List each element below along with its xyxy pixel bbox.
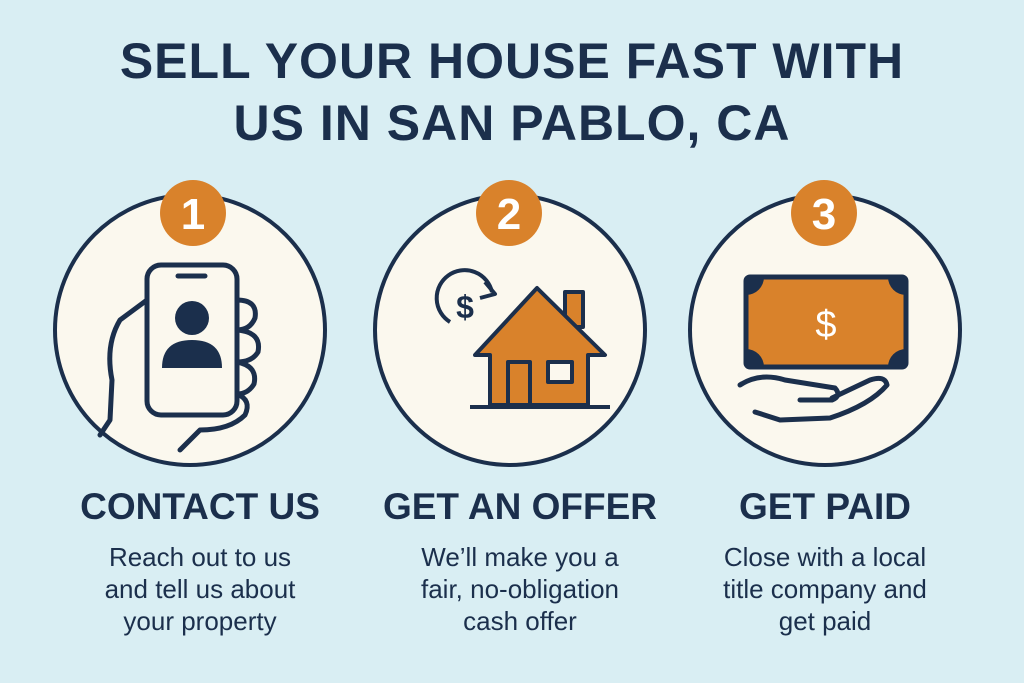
badge: 1: [160, 180, 226, 246]
text: step 3: get paid: [779, 606, 871, 636]
panel: step 1 circle: [55, 195, 325, 465]
panel: step 2 circle: $: [456, 289, 474, 325]
text: step 1: your property: [123, 606, 277, 636]
text: step 1: [105, 542, 296, 636]
text: step 2: fair, no-obligation: [421, 574, 619, 604]
text: step 3: title company and: [723, 574, 927, 604]
icon: house with dollar: [437, 270, 610, 407]
title: [120, 33, 904, 151]
text: step 3: [723, 542, 927, 636]
heading: get an offer: GET AN OFFER: [383, 486, 657, 527]
title: SELL YOUR HOUSE FAST WITH: [120, 33, 904, 89]
text: step 2: We’ll make you a: [421, 542, 619, 572]
text: step 2: cash offer: [463, 606, 577, 636]
badge: 2: 2: [497, 190, 521, 239]
panel: step 3 circle: [690, 195, 960, 465]
heading: get paid: GET PAID: [739, 486, 911, 527]
badge: 2: [476, 180, 542, 246]
badge: 1: 1: [181, 190, 205, 239]
badge: 3: 3: [812, 190, 836, 239]
badge: 3: [791, 180, 857, 246]
heading: contact us: CONTACT US: [80, 486, 320, 527]
icon: cash in hand: [746, 277, 906, 367]
text: step 1: and tell us about: [105, 574, 295, 604]
panel: step 3 circle: $: [815, 304, 837, 346]
text: step 1: Reach out to us: [109, 542, 291, 572]
title: US IN SAN PABLO, CA: [234, 95, 790, 151]
panel: step 2 circle: [375, 195, 645, 465]
icon: phone with hand: [100, 265, 259, 450]
text: step 2: [421, 542, 619, 636]
text: step 3: Close with a local: [724, 542, 926, 572]
